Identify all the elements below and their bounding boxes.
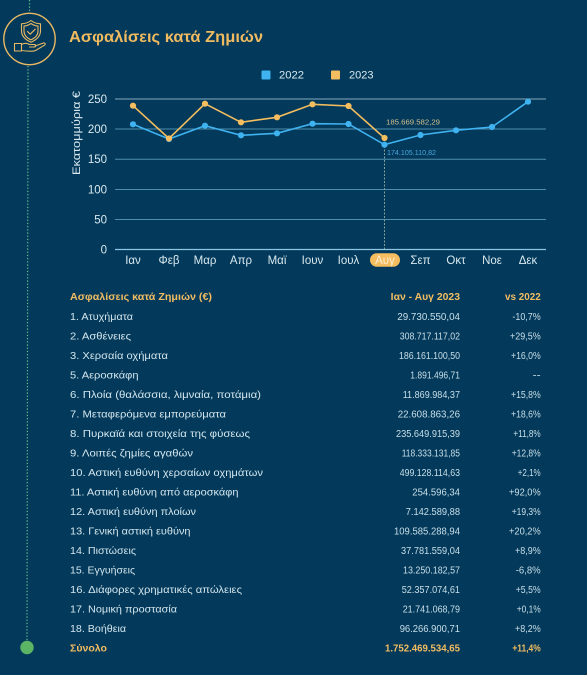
- row 17: 17. Νομική προστασία: [70, 603, 177, 615]
- row 6: [70, 389, 541, 401]
- row 9: +12,8%: [512, 448, 541, 459]
- y axis labels: 250: [88, 94, 107, 106]
- table header: Ασφαλίσεις κατά Ζημιών (€): [70, 291, 212, 303]
- month labels: [125, 253, 538, 267]
- row 10: +2,1%: [518, 468, 541, 479]
- y axis labels: 0: [101, 244, 107, 256]
- row 6: +15,8%: [511, 390, 541, 401]
- row 9: 9. Λοιπές ζημίες αγαθών: [70, 447, 193, 459]
- row 10: [70, 467, 541, 479]
- row 2: +29,5%: [510, 331, 541, 342]
- timeline: dotted line with end dot: [20, 0, 34, 654]
- month labels: Απρ: [230, 255, 253, 267]
- row 15: 13.250.182,57: [403, 565, 460, 576]
- y axis labels: 100: [88, 184, 107, 196]
- row 5: [70, 370, 541, 382]
- row 5: --: [533, 370, 541, 382]
- y axis labels: 200: [88, 124, 107, 136]
- row 9: [70, 447, 541, 459]
- row 13: +20,2%: [509, 526, 541, 537]
- row 14: +8,9%: [515, 546, 541, 557]
- row 1: -10,7%: [512, 312, 541, 323]
- month labels: Ιουν: [302, 255, 324, 267]
- row 7: 22.608.863,26: [398, 409, 460, 420]
- y axis title: Εκατομμύρια €: [71, 91, 83, 175]
- row 18: 18. Βοήθεια: [70, 623, 126, 635]
- month labels: Οκτ: [446, 255, 466, 267]
- row 7: +18,6%: [511, 409, 541, 420]
- row 17: +0,1%: [517, 604, 541, 615]
- row 16: +5,5%: [516, 585, 541, 596]
- row 3: 3. Χερσαία οχήματα: [70, 350, 168, 362]
- total row: +11,4%: [512, 643, 541, 654]
- row 16: 16. Διάφορες χρηματικές απώλειες: [70, 584, 242, 596]
- row 16: [70, 584, 541, 596]
- row 2: 308.717.117,02: [400, 331, 460, 342]
- row 6: 6. Πλοία (θαλάσσια, λιμναία, ποτάμια): [70, 389, 261, 401]
- month labels: Ιουλ: [338, 255, 360, 267]
- row 11: 11. Αστική ευθύνη από αεροσκάφη: [70, 486, 239, 498]
- august marker line: [384, 146, 386, 249]
- table header: vs 2022: [505, 292, 541, 303]
- grid lines: [115, 99, 546, 250]
- month labels: Φεβ: [159, 255, 180, 267]
- row 15: [70, 564, 541, 576]
- legend: 2022: [279, 70, 304, 82]
- legend: 2023: [349, 70, 374, 82]
- series 2023: [130, 101, 388, 142]
- row 8: 8. Πυρκαϊά και στοιχεία της φύσεως: [70, 428, 250, 440]
- row 14: 37.781.559,04: [401, 546, 460, 557]
- row 10: 499.128.114,63: [400, 468, 460, 479]
- row 1: [70, 311, 541, 323]
- row 12: 12. Αστική ευθύνη πλοίων: [70, 506, 196, 518]
- row 18: [70, 623, 541, 635]
- row 8: [70, 428, 541, 440]
- row 5: 1.891.496,71: [410, 370, 460, 382]
- row 15: 15. Εγγυήσεις: [70, 564, 135, 576]
- row 1: 1. Ατυχήματα: [70, 311, 133, 323]
- row 9: 118.333.131,85: [402, 448, 460, 459]
- row 2: [70, 330, 541, 342]
- row 11: 254.596,34: [412, 487, 460, 498]
- row 6: 11.869.984,37: [403, 390, 460, 401]
- total row: 1.752.469.534,65: [385, 643, 460, 654]
- y axis labels: 150: [88, 154, 107, 166]
- series 2022: [130, 99, 531, 148]
- y axis labels: [88, 94, 107, 256]
- row 13: [70, 525, 541, 537]
- value callout 2022: 174.105.110,82: [387, 148, 436, 157]
- row 12: 7.142.589,88: [406, 507, 460, 518]
- month labels: Δεκ: [519, 255, 538, 267]
- total row: [70, 642, 541, 654]
- table header: Ιαν - Αυγ 2023: [391, 292, 460, 303]
- month labels: Μαϊ: [268, 255, 287, 267]
- title: Ασφαλίσεις κατά Ζημιών: [69, 29, 263, 46]
- total row: Σύνολο: [70, 642, 107, 654]
- icon: shield over hand in circle: [4, 13, 55, 65]
- table header: [70, 291, 541, 303]
- month labels: Μαρ: [194, 255, 217, 267]
- month labels: Ιαν: [125, 255, 141, 267]
- row 3: 186.161.100,50: [399, 351, 460, 362]
- month labels: Σεπ: [410, 255, 431, 267]
- table: [70, 291, 541, 654]
- row 15: -6,8%: [516, 565, 541, 576]
- line chart: [71, 91, 546, 267]
- row 14: 14. Πιστώσεις: [70, 545, 136, 557]
- row 11: [70, 486, 541, 498]
- row 1: 29.730.550,04: [397, 312, 460, 323]
- row 18: 96.266.900,71: [400, 624, 460, 635]
- row 5: 5. Αεροσκάφη: [70, 370, 139, 382]
- row 18: +8,2%: [515, 624, 541, 635]
- row 8: +11,8%: [513, 429, 541, 440]
- row 3: [70, 350, 541, 362]
- row 14: [70, 545, 541, 557]
- legend: [262, 70, 374, 82]
- row 7: [70, 408, 541, 420]
- row 16: 52.357.074,61: [402, 585, 460, 596]
- row 12: [70, 506, 541, 518]
- row 13: 109.585.288,94: [394, 526, 460, 537]
- month labels: Αυγ: [375, 255, 395, 267]
- y axis labels: 50: [94, 214, 107, 226]
- row 11: +92,0%: [509, 487, 541, 498]
- row 17: 21.741.068,79: [403, 604, 460, 615]
- row 2: 2. Ασθένειες: [70, 330, 131, 342]
- row 13: 13. Γενική αστική ευθύνη: [70, 525, 191, 537]
- row 10: 10. Αστική ευθύνη χερσαίων οχημάτων: [70, 467, 263, 479]
- value callout 2023: 185.669.582,29: [386, 118, 440, 126]
- row 3: +16,0%: [511, 351, 541, 362]
- month labels: Νοε: [482, 255, 502, 267]
- row 12: +19,3%: [512, 507, 541, 518]
- row 8: 235.649.915,39: [396, 429, 460, 440]
- row 7: 7. Μεταφερόμενα εμπορεύματα: [70, 408, 226, 420]
- row 17: [70, 603, 541, 615]
